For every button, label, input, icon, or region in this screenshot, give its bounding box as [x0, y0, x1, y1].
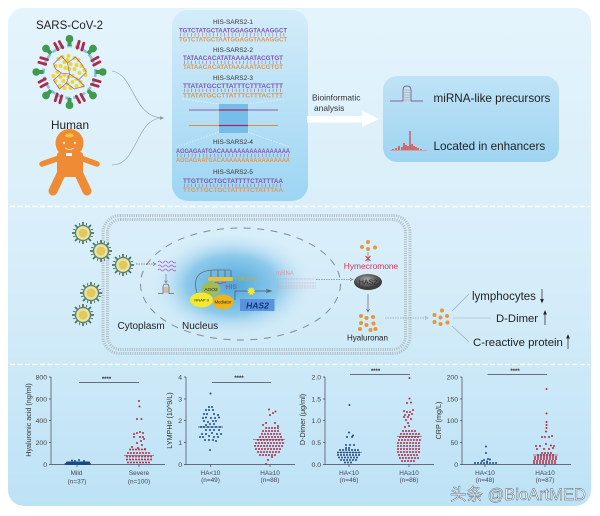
chart: CRP: 100 [447, 418, 458, 425]
chart: CRP: 200 [447, 374, 458, 382]
chart: lymphocytes: **** [234, 376, 244, 382]
chart: hyaluronic acid: 600 [36, 396, 47, 404]
label: D-Dimer up: D-Dimer [496, 313, 538, 325]
diagram: HIS silencing complex at HAS2: AGO2 [204, 287, 218, 293]
icon: coronavirus [32, 35, 107, 109]
chart: CRP: (n=87) [536, 477, 554, 484]
chart: lymphocytes: 0 [178, 462, 182, 469]
sequence HIS-SARS2-5: HIS-SARS2-5 [213, 169, 253, 176]
chart: CRP: 50 [450, 440, 458, 447]
label: Located in enhancers: Located in enhancers [434, 140, 545, 153]
arrow: virus to RNA [136, 262, 156, 266]
chart: CRP: 150 [447, 396, 458, 404]
mRNA transcript [276, 271, 353, 288]
chart: D-dimer: HA≥10 [399, 470, 419, 477]
sequence HIS-SARS2-1 [179, 19, 287, 44]
chart: lymphocytes [165, 374, 295, 484]
HAS2 enzyme [354, 274, 382, 290]
sequence HIS-SARS2-5 [183, 169, 284, 194]
arrow: release outside of cell [385, 316, 428, 320]
Hymecromone inhibition: Hymecromone [344, 261, 399, 271]
chart: lymphocytes: LYMPH# (10^9/L) [165, 392, 174, 449]
sequence HIS-SARS2-3: HIS-SARS2-3 [213, 75, 253, 82]
chart: D-dimer: HA<10 [339, 470, 359, 477]
labels: cytoplasm and nucleus: Nucleus [182, 321, 218, 332]
sequence HIS-SARS2-4: HIS-SARS2-4 [213, 139, 253, 146]
sequence HIS-SARS2-1: TGTCTATGCTAATGGAGGTAAAGGCT [179, 36, 287, 44]
chart: D-dimer: 2.0 [312, 374, 321, 382]
chart: hyaluronic acid: Hyaluronic acid (ng/ml) [24, 383, 33, 457]
Hyaluronan cluster [347, 314, 388, 342]
icons: entering viruses [72, 222, 134, 326]
sequence HIS-SARS2-1: TGTCTATGCTAATGGAGGTAAAGGCT [179, 28, 287, 34]
chart: D-dimer: 0.5 [312, 440, 321, 447]
sequence HIS-SARS2-2: HIS-SARS2-2 [213, 47, 253, 54]
diagram: HIS silencing complex at HAS2: HIS [226, 284, 238, 291]
chart: D-dimer: 1.0 [312, 418, 321, 425]
outcome cluster [432, 308, 450, 326]
sequence HIS-SARS2-3 [183, 75, 283, 100]
chart: CRP: **** [510, 369, 520, 375]
chart: hyaluronic acid: Mild [71, 470, 83, 477]
chart: D-dimer: (n=86) [400, 477, 418, 484]
chart: D-dimer: **** [371, 369, 381, 375]
chart: hyaluronic acid: **** [102, 377, 112, 383]
chart: lymphocytes: HA≥10 [260, 470, 280, 477]
diagram: HIS silencing complex at HAS2 [190, 270, 274, 311]
panel: HIS-SARS2 sequences [172, 10, 308, 201]
chart: CRP: HA<10 [475, 470, 495, 477]
arrow: white analysis arrow [307, 111, 379, 127]
sequence HIS-SARS2-5: TTGTTGCTGCTATTTTCTATTTAA [183, 187, 284, 194]
labels: cytoplasm and nucleus [118, 321, 218, 332]
sequence HIS-SARS2-1: HIS-SARS2-1 [213, 19, 253, 26]
chart: lymphocytes: 3 [178, 396, 182, 404]
label: Human: Human [51, 118, 89, 132]
outcome connectors [452, 294, 491, 342]
HAS2 enzyme: HAS2 [359, 280, 377, 286]
sequence HIS-SARS2-2 [183, 47, 283, 71]
label: miRNA-like precursors: miRNA-like precursors [434, 92, 551, 105]
title: SARS-CoV-2: SARS-CoV-2 [36, 20, 103, 32]
chart: CRP: HA≥10 [535, 470, 555, 477]
arrow: HAS2 to hyaluronan [366, 294, 370, 312]
chart: D-dimer [298, 369, 434, 484]
label: C-reactive protein up: C-reactive protein [473, 337, 563, 349]
watermark: 头条 @BioArtMED [450, 485, 586, 504]
sequence HIS-SARS2-4: AGGAGAATGACAAAAAAAAAAAAAAAAA [176, 157, 290, 164]
label: Bioinformatic analysis: Bioinformatic [312, 92, 360, 102]
label: Bioinformatic analysis: analysis [314, 103, 344, 113]
sequence HIS-SARS2-2: TATAACACATATAAAAATACGTGT [183, 64, 283, 71]
chart: hyaluronic acid: 200 [36, 440, 47, 447]
chart: CRP: (n=48) [476, 477, 494, 484]
nucleus [140, 228, 340, 340]
chart: lymphocytes: (n=49) [201, 477, 220, 484]
chart: lymphocytes: (n=88) [261, 477, 279, 484]
chart: hyaluronic acid: (n=37) [68, 478, 86, 486]
diagram: HIS silencing complex at HAS2: HAS2 [246, 300, 269, 310]
diagram: HIS silencing complex at HAS2: RNAP II [194, 298, 209, 302]
chart: CRP: 0 [454, 462, 458, 469]
chart: hyaluronic acid: 800 [36, 374, 47, 382]
chart: hyaluronic acid: 400 [36, 418, 47, 425]
chart: lymphocytes: 2 [178, 418, 182, 425]
cell membrane [103, 216, 410, 354]
chart: hyaluronic acid: Severe [129, 470, 150, 477]
Hyaluronan cluster: Hyaluronan [347, 334, 388, 342]
icon: hairpin [390, 86, 423, 101]
diagram: HIS silencing complex at HAS2: Mediator [214, 300, 232, 304]
label: lymphocytes down: lymphocytes [472, 291, 536, 303]
chart: hyaluronic acid: 0 [43, 462, 47, 469]
icon: human figure [42, 129, 97, 191]
chart: lymphocytes: 4 [178, 374, 182, 382]
arrows: merging curves [112, 71, 164, 165]
sequence HIS-SARS2-3: TTATATGCCTTATTTCTTTACTTT [183, 83, 283, 90]
diagram: aligned strands with homologous region [176, 99, 290, 147]
chart: CRP [434, 369, 571, 484]
chart: hyaluronic acid [24, 374, 165, 486]
sequence HIS-SARS2-4 [176, 139, 290, 164]
mRNA transcript: mRNA [276, 271, 294, 277]
sequence HIS-SARS2-2: TATAACACATATAAAAATACGTGT [183, 55, 283, 62]
chart: lymphocytes: HA<10 [201, 470, 221, 477]
panel: cell mechanism [72, 216, 428, 354]
chart: CRP: CRP (mg/L) [434, 402, 443, 439]
chart: D-dimer: 1.5 [312, 396, 321, 404]
label: Bioinformatic analysis [312, 92, 360, 113]
labels: cytoplasm and nucleus: Cytoplasm [118, 321, 165, 332]
chart: D-dimer: (n=46) [340, 477, 358, 484]
sequence HIS-SARS2-4: AGGAGAATGACAAAAAAAAAAAAAAAAA [176, 148, 290, 155]
sequence HIS-SARS2-3: TTATATGCCTTATTTCTTTACTTT [183, 92, 283, 100]
sequence HIS-SARS2-5: TTGTTGCTGCTATTTTCTATTTAA [183, 178, 284, 185]
chart: hyaluronic acid: (n=100) [128, 478, 150, 486]
diagram: HIS silencing complex at HAS2: H3K27ac [235, 276, 258, 282]
panel: results [383, 76, 559, 162]
icon: enhancer peaks [390, 131, 427, 150]
Hymecromone inhibition [344, 240, 399, 271]
icon: viral RNA and hairpin [158, 261, 176, 294]
chart: lymphocytes: 1 [178, 440, 182, 447]
chart: D-dimer: D-Dimer (μg/ml) [298, 394, 307, 445]
chart: D-dimer: 0.0 [312, 462, 321, 469]
